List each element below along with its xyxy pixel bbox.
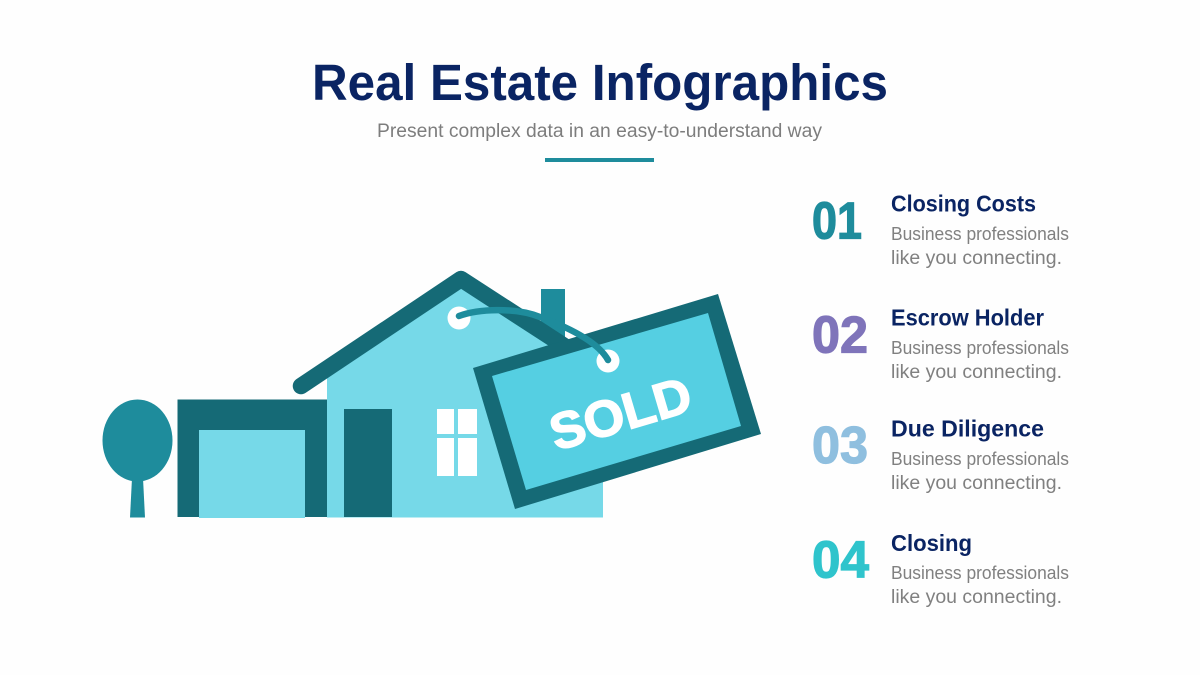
description: like you connecting.	[891, 362, 1062, 383]
illustration: house with sold sign	[102, 279, 761, 518]
window	[437, 409, 477, 476]
house body	[327, 286, 603, 518]
title underline	[545, 158, 654, 162]
item 1	[812, 190, 1069, 269]
sign text: SOLD	[543, 366, 698, 462]
description: Business professionals	[891, 448, 1069, 469]
number 03: 03	[812, 417, 868, 475]
door	[344, 409, 392, 517]
description: Business professionals	[891, 337, 1069, 358]
description: like you connecting.	[891, 587, 1062, 608]
description: like you connecting.	[891, 473, 1062, 494]
number 01: 01	[812, 192, 862, 250]
number 04: 04	[812, 532, 869, 590]
icon: tree	[102, 400, 172, 518]
description: Business professionals	[891, 562, 1069, 583]
title: Real Estate Infographics	[312, 54, 888, 111]
garage	[178, 400, 327, 518]
heading: Due Diligence	[891, 416, 1044, 442]
description: like you connecting.	[891, 248, 1062, 269]
subtitle: Present complex data in an easy-to-understand way	[377, 121, 822, 142]
heading: Closing	[891, 530, 972, 556]
chimney	[541, 289, 565, 339]
heading: Escrow Holder	[891, 304, 1044, 330]
heading: Closing Costs	[891, 190, 1036, 216]
sold sign	[473, 294, 761, 509]
number 02: 02	[812, 306, 868, 364]
description: Business professionals	[891, 223, 1069, 244]
hanging string	[459, 310, 608, 360]
item 3	[812, 416, 1069, 494]
item 2	[812, 304, 1069, 383]
item 4	[812, 530, 1069, 608]
hanger holes	[448, 306, 620, 372]
roof	[301, 279, 575, 386]
